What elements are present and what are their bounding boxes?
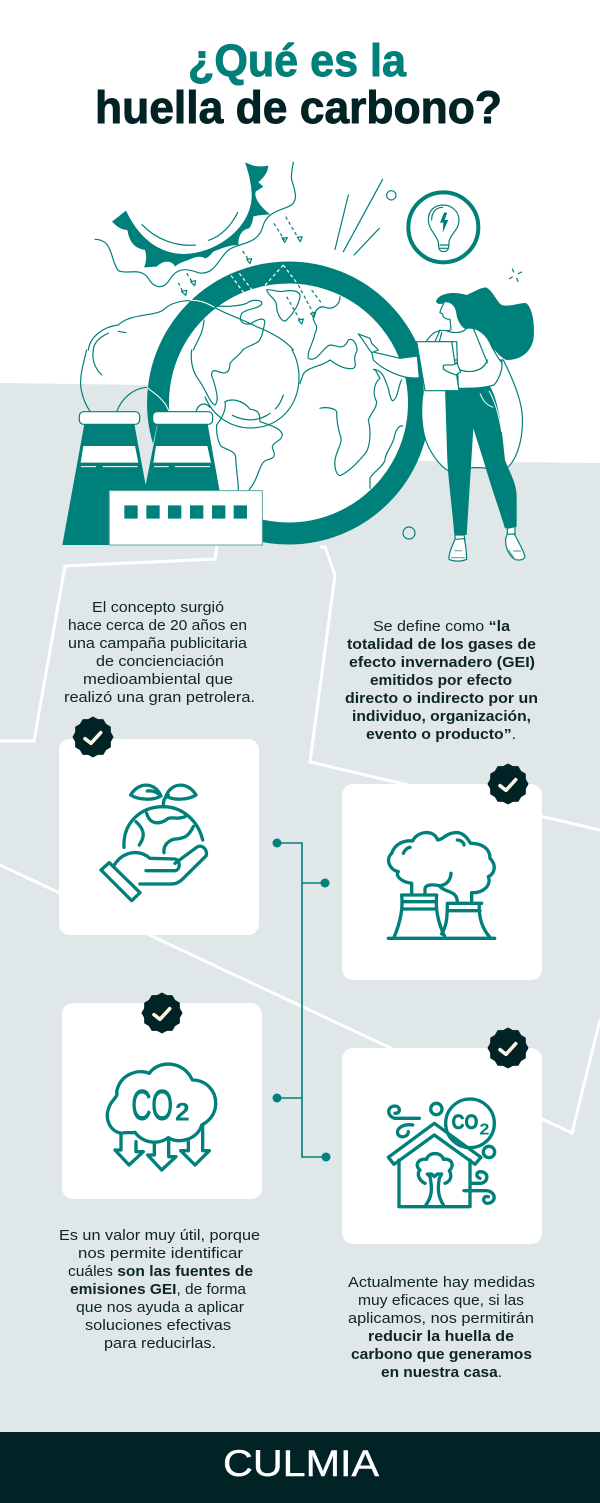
text block: definition: individuo, organización,: [352, 708, 531, 725]
badge: [488, 1028, 528, 1068]
lines and bubble: [335, 179, 522, 281]
footer logo: CULMIA: [223, 1443, 379, 1484]
hand on clipboard: [443, 363, 461, 375]
text block: definition: emitidos por efecto: [370, 672, 512, 689]
hair: [436, 288, 534, 360]
panel: card CO2 cloud: [62, 993, 262, 1199]
panel: card power plant: [342, 764, 542, 980]
icon: house with tree and CO2: 2: [479, 1122, 489, 1139]
text block: usefulness: [59, 1227, 260, 1352]
icon: light bulb: [408, 192, 478, 262]
title: [95, 35, 502, 133]
icon: CO2 cloud: 2: [175, 1098, 190, 1126]
panel: card house: [342, 1028, 542, 1244]
text block: origin of the concept: medioambiental que: [83, 671, 233, 688]
text block: origin of the concept: hace cerca de 20 años en: [68, 617, 247, 634]
icon: CO2 cloud: [107, 1064, 216, 1170]
title: ¿Qué es la: [188, 35, 407, 86]
illustration: earth, factory and woman: [62, 162, 534, 561]
hair back: [420, 360, 522, 471]
background panel: [0, 383, 600, 1432]
sleeve and hand: [372, 352, 419, 378]
text block: definition: totalidad de los gases de: [347, 636, 536, 653]
torso: [426, 328, 502, 388]
text block: definition: Se define como “la: [373, 618, 511, 635]
factory: [62, 412, 262, 545]
continents: [215, 290, 300, 350]
text block: measures: muy eficaces que, si las: [358, 1292, 524, 1309]
smoke: [88, 300, 293, 350]
small circle: [403, 527, 415, 539]
panel: card plant globe: [59, 717, 259, 935]
text block: usefulness: emisiones GEI, de forma: [70, 1281, 247, 1298]
ring around globe: [158, 272, 419, 534]
sun and clouds: [95, 162, 303, 295]
text block: usefulness: que nos ayuda a aplicar: [76, 1299, 244, 1316]
text block: origin of the concept: una campaña publicitaria: [68, 635, 248, 652]
text block: origin of the concept: realizó una gran petrolera.: [64, 689, 255, 706]
text block: definition: [345, 618, 538, 743]
text block: measures: Actualmente hay medidas: [348, 1274, 535, 1291]
title: huella de carbono?: [95, 82, 502, 133]
woman: [420, 360, 522, 471]
text block: definition: efecto invernadero (GEI): [349, 654, 535, 671]
badge: [488, 764, 528, 804]
text block: origin of the concept: El concepto surgió: [92, 599, 224, 616]
chimney caps: [79, 412, 140, 424]
text block: usefulness: cuáles son las fuentes de: [68, 1263, 253, 1280]
text block: origin of the concept: de concienciación: [96, 653, 224, 670]
text block: measures: reducir la huella de: [368, 1328, 514, 1345]
factory chimneys: [62, 424, 220, 545]
dashed radiation arrows: [224, 265, 322, 324]
icon: cooling towers with smoke: [388, 833, 495, 938]
factory building: [109, 491, 262, 545]
text block: usefulness: para reducirlas.: [104, 1335, 216, 1352]
icon: house with tree and CO2: CO: [452, 1110, 478, 1134]
face: [440, 302, 466, 332]
text block: usefulness: soluciones efectivas: [85, 1317, 231, 1334]
badge: [142, 993, 182, 1033]
text block: usefulness: Es un valor muy útil, porque: [59, 1227, 260, 1244]
text block: usefulness: nos permite identificar: [78, 1245, 243, 1262]
connector lines: [272, 838, 330, 1162]
text block: measures: [348, 1274, 535, 1381]
shoes: [455, 527, 515, 540]
badge: [73, 717, 113, 757]
icon: CO2 cloud: CO: [131, 1081, 173, 1129]
icon: house with tree and CO2: [388, 1099, 495, 1207]
text block: measures: carbono que generamos: [351, 1346, 532, 1363]
text block: definition: evento o producto” .: [366, 726, 516, 743]
icon: hand holding globe: [101, 785, 206, 901]
text block: origin of the concept: [64, 599, 255, 706]
clipboard: [417, 342, 459, 391]
footer band: [0, 1432, 600, 1503]
smoke cloud arc over globe: [205, 350, 299, 428]
text block: definition: directo o indirecto por un: [345, 690, 538, 707]
trousers: [445, 387, 517, 535]
text block: measures: aplicamos, nos permitirán: [348, 1310, 534, 1327]
text block: measures: en nuestra casa.: [381, 1364, 502, 1381]
